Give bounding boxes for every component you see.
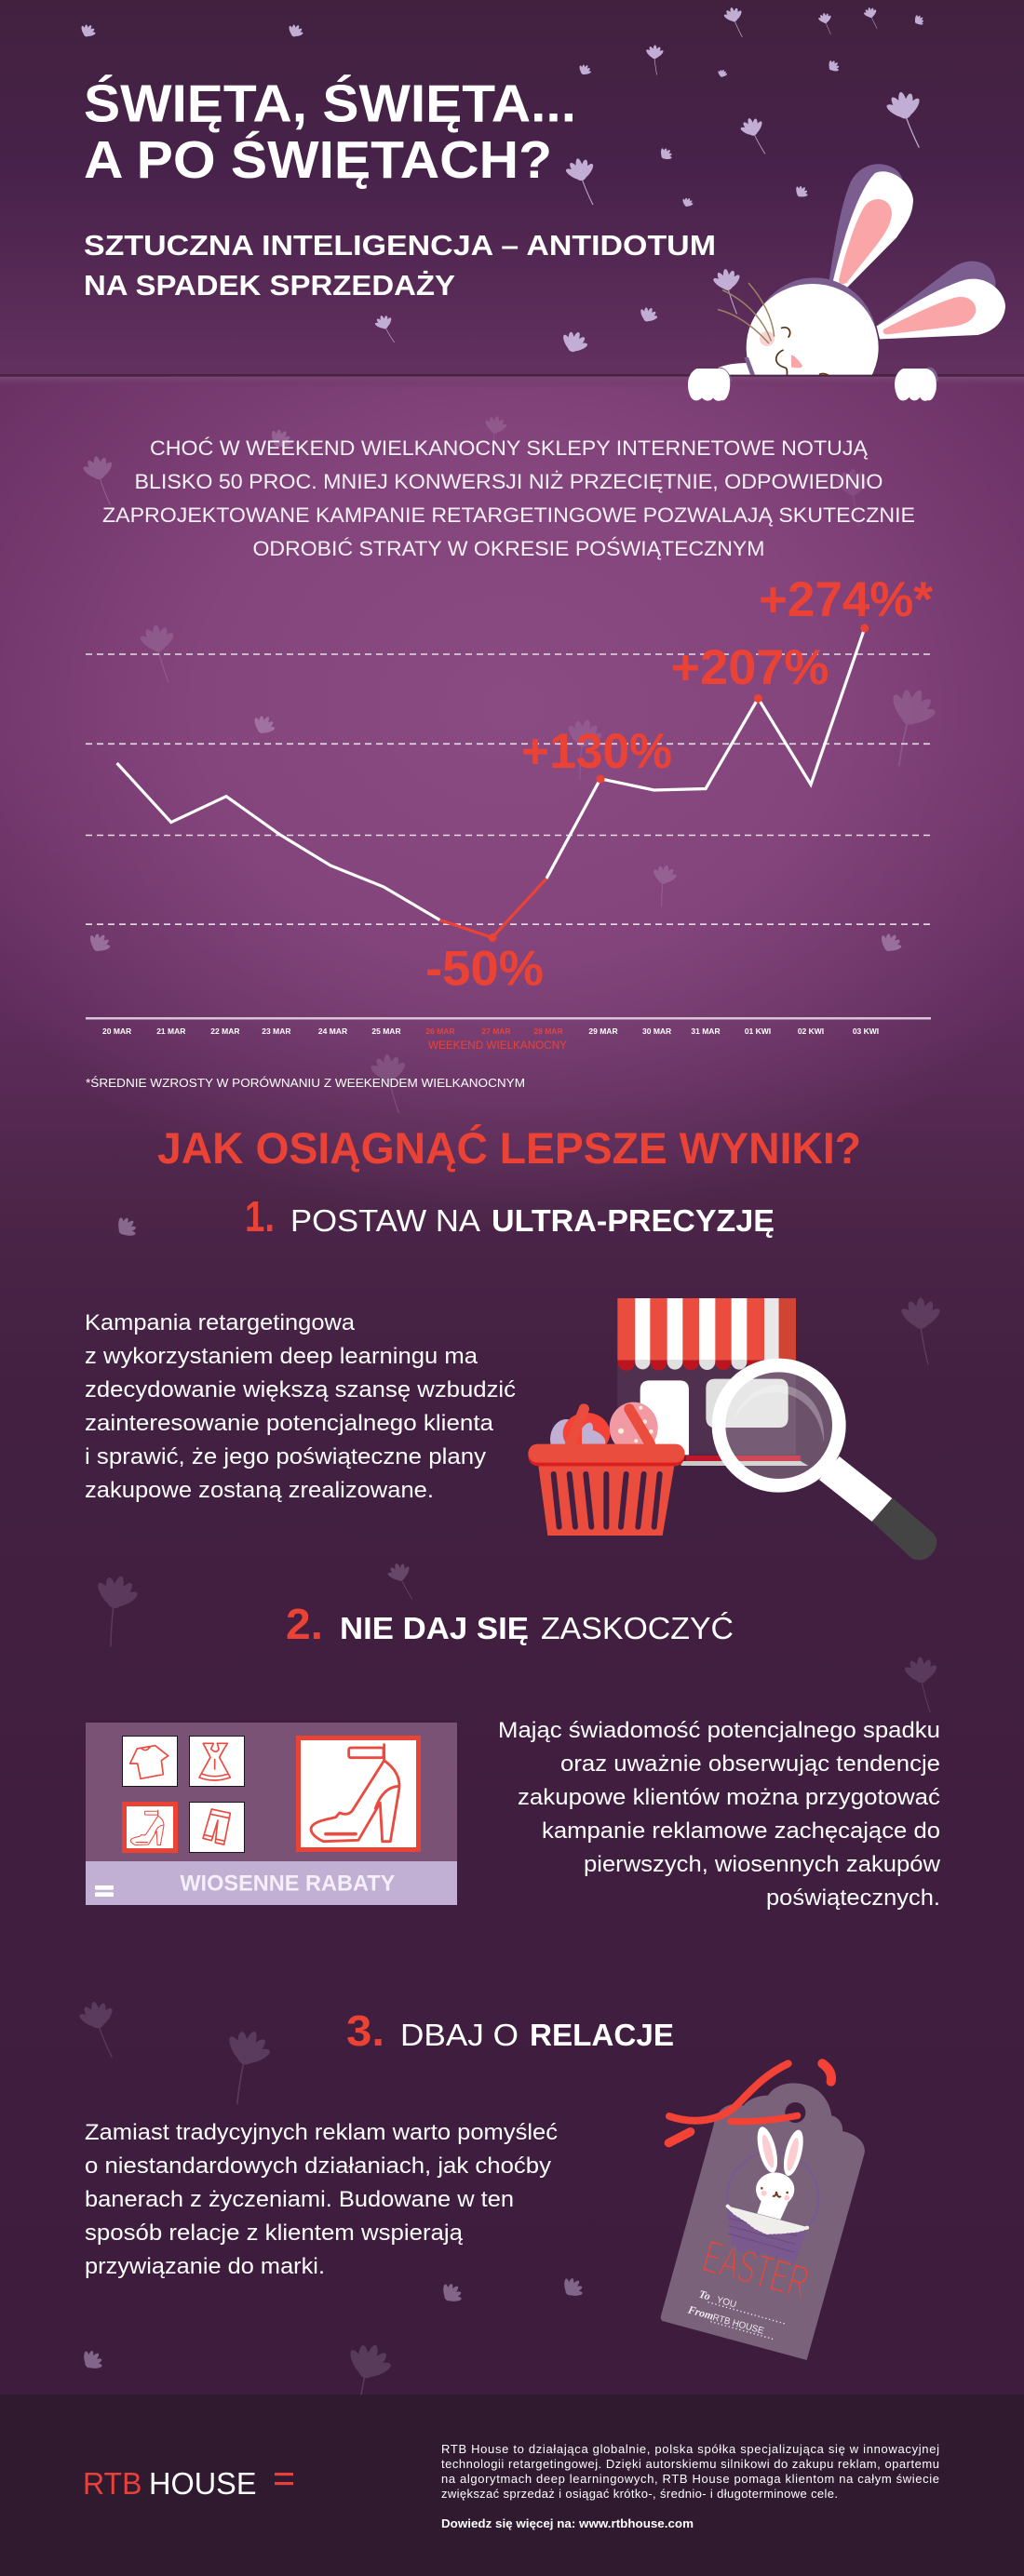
step 3 paragraph: Zamiast tradycyjnych reklam warto pomyśleć — [85, 2120, 558, 2145]
bunny ear, sideways — [876, 262, 1005, 339]
x axis date labels: 21 MAR — [156, 1026, 185, 1036]
x axis date labels: 20 MAR — [102, 1026, 131, 1036]
step 1 paragraph: z wykorzystaniem deep learningu ma — [85, 1344, 478, 1369]
step 3 heading: DBAJ O — [400, 2018, 519, 2052]
x axis date labels: 02 KWI — [798, 1026, 824, 1036]
banner footer bar — [86, 1861, 457, 1905]
product tile: t-shirt — [122, 1736, 177, 1786]
intro paragraph: BLISKO 50 PROC. MNIEJ KONWERSJI NIŻ PRZECIĘTNIE, ODPOWIEDNIO — [134, 470, 883, 493]
basket with eggs — [528, 1402, 685, 1536]
step 1 heading — [245, 1192, 775, 1241]
product tile: trousers — [189, 1802, 244, 1852]
value label 274: +274%* — [759, 572, 933, 627]
x axis date labels: 26 MAR — [425, 1026, 455, 1036]
step 2 paragraph: zakupowe klientów można przygotować — [518, 1785, 940, 1810]
x axis date labels: 01 KWI — [745, 1026, 771, 1036]
RTB House logo — [83, 2467, 293, 2502]
intro paragraph: ODROBIĆ STRATY W OKRESIE POŚWIĄTECZNYM — [253, 537, 765, 560]
weekend caption: WEEKEND WIELKANOCNY — [428, 1039, 567, 1052]
RTB House logo: RTB — [83, 2467, 141, 2502]
data point dots — [488, 624, 869, 942]
intro paragraph: CHOĆ W WEEKEND WIELKANOCNY SKLEPY INTERNETOWE NOTUJĄ — [150, 436, 868, 460]
ribbon — [668, 2063, 831, 2143]
title — [84, 74, 576, 190]
x axis date labels: 31 MAR — [691, 1026, 721, 1036]
product tile: large shoe — [298, 1737, 418, 1849]
decorative petals: header — [77, 6, 931, 357]
background: chart glow — [0, 375, 1024, 1306]
title: ŚWIĘTA, ŚWIĘTA... — [84, 74, 576, 134]
banner ad mockup — [86, 1723, 457, 1905]
step 1 paragraph: zakupowe zostaną zrealizowane. — [85, 1478, 434, 1503]
banner panel — [86, 1723, 457, 1861]
step 1 paragraph — [85, 1310, 516, 1503]
to and from lines: To — [697, 2288, 712, 2303]
to and from lines — [686, 2286, 789, 2341]
x axis date labels: 25 MAR — [371, 1026, 401, 1036]
x axis date labels: 03 KWI — [853, 1026, 879, 1036]
x axis — [86, 1017, 931, 1020]
company description: Dowiedz się więcej na: www.rtbhouse.com — [441, 2516, 694, 2530]
step 2 paragraph: Mając świadomość potencjalnego spadku — [498, 1718, 940, 1743]
background: main gradient — [0, 375, 1024, 2395]
step 3 heading: RELACJE — [530, 2018, 674, 2052]
chart grid lines — [86, 654, 931, 924]
company description: na algorytmach deep learningowych, RTB House pomaga klientom na całym świecie — [441, 2472, 939, 2486]
x axis date labels — [102, 1026, 879, 1036]
background: header band — [0, 0, 1024, 375]
section heading: JAK OSIĄGNĄĆ LEPSZE WYNIKI? — [157, 1123, 861, 1173]
icon: bunny peeking over the ledge — [688, 164, 1005, 411]
step 3 heading — [346, 2006, 674, 2055]
step 3 paragraph — [85, 2120, 558, 2279]
subtitle: NA SPADEK SPRZEDAŻY — [84, 269, 455, 302]
step 3 heading: 3. — [346, 2006, 384, 2055]
illustration: shop, basket and magnifier — [528, 1298, 936, 1560]
shop awning — [617, 1298, 796, 1371]
product tile: shoe, selected — [124, 1804, 175, 1850]
banner footer bar: WIOSENNE RABATY — [180, 1872, 396, 1897]
x axis date labels: 22 MAR — [210, 1026, 239, 1036]
x axis date labels: 29 MAR — [588, 1026, 618, 1036]
step 1 paragraph: Kampania retargetingowa — [85, 1310, 355, 1335]
decorative petals: lower sections — [75, 1212, 942, 2423]
Easter lettering: EASTER — [697, 2230, 815, 2309]
bunny head — [717, 277, 879, 376]
step 2 paragraph: poświątecznych. — [766, 1885, 940, 1911]
x axis date labels: 27 MAR — [481, 1026, 511, 1036]
x axis date labels: 28 MAR — [533, 1026, 563, 1036]
tag body — [661, 2083, 865, 2360]
x axis date labels: 23 MAR — [262, 1026, 290, 1036]
shop — [617, 1298, 808, 1466]
step 2 paragraph — [498, 1718, 940, 1911]
illustration: Easter gift tag — [661, 2063, 865, 2360]
step 2 paragraph: oraz uważnie obserwując tendencje — [560, 1751, 940, 1777]
step 3 paragraph: banerach z życzeniami. Budowane w ten — [85, 2187, 514, 2212]
data line, white — [117, 628, 865, 920]
subtitle: SZTUCZNA INTELIGENCJA – ANTIDOTUM — [84, 229, 716, 262]
data line, Easter weekend segment — [439, 879, 546, 938]
magnifying glass — [719, 1365, 936, 1560]
title: A PO ŚWIĘTACH? — [84, 130, 552, 190]
to and from lines: YOU — [715, 2295, 737, 2310]
decorative petals: chart area — [80, 414, 944, 1115]
to and from lines: RTB HOUSE — [711, 2313, 765, 2337]
intro paragraph: ZAPROJEKTOWANE KAMPANIE RETARGETINGOWE POZWALAJĄ SKUTECZNIE — [102, 503, 915, 527]
line chart — [86, 572, 933, 1052]
bunny ear, upright — [829, 164, 913, 290]
RTB House logo: HOUSE — [149, 2467, 257, 2502]
tag basket bunny — [726, 2125, 818, 2266]
value label minus 50: -50% — [425, 942, 544, 996]
header ledge line — [0, 374, 1024, 376]
step 1 heading: ULTRA-PRECYZJĘ — [492, 1203, 775, 1238]
step 3 paragraph: przywiązanie do marki. — [85, 2254, 325, 2279]
value label 130: +130% — [521, 724, 672, 779]
x axis date labels: 30 MAR — [642, 1026, 671, 1036]
intro paragraph — [102, 436, 915, 560]
to and from lines: From — [686, 2302, 715, 2323]
step 2 paragraph: pierwszych, wiosennych zakupów — [584, 1852, 940, 1877]
x axis date labels: 24 MAR — [318, 1026, 347, 1036]
step 1 paragraph: i sprawić, że jego poświąteczne plany — [85, 1444, 487, 1469]
footer panel — [0, 2395, 1024, 2576]
company description: zwiększać sprzedaż i osiągać krótko-, średnio- i długoterminowe cele. — [441, 2487, 838, 2501]
value label 207: +207% — [670, 640, 829, 695]
footnote: *ŚREDNIE WZROSTY W PORÓWNANIU Z WEEKENDEM WIELKANOCNYM — [86, 1076, 525, 1090]
step 2 heading — [286, 1600, 734, 1648]
step 3 paragraph: o niestandardowych działaniach, jak choćby — [85, 2153, 552, 2179]
company description: RTB House to działająca globalnie, polska spółka specjalizująca się w innowacyjnej — [441, 2442, 939, 2456]
company description — [441, 2442, 939, 2530]
bunny paw, right — [895, 368, 938, 401]
step 2 paragraph: kampanie reklamowe zachęcające do — [542, 1818, 940, 1844]
company description: technologii retargetingowej. Dzięki autorskiemu silnikowi do zakupu reklam, opartemu — [441, 2457, 939, 2471]
step 2 heading: 2. — [286, 1600, 323, 1648]
step 2 heading: ZASKOCZYĆ — [541, 1611, 734, 1645]
product tile: dress — [189, 1736, 244, 1786]
step 3 paragraph: sposób relacje z klientem wspierają — [85, 2220, 463, 2246]
subtitle — [84, 229, 716, 302]
header ledge highlight — [0, 377, 1024, 388]
step 1 paragraph: zainteresowanie potencjalnego klienta — [85, 1411, 493, 1436]
bunny paw, left — [688, 368, 733, 401]
step 1 heading: 1. — [245, 1192, 275, 1241]
step 1 heading: POSTAW NA — [290, 1203, 480, 1238]
step 1 paragraph: zdecydowanie większą szansę wzbudzić — [85, 1377, 516, 1402]
step 2 heading: NIE DAJ SIĘ — [340, 1611, 529, 1645]
